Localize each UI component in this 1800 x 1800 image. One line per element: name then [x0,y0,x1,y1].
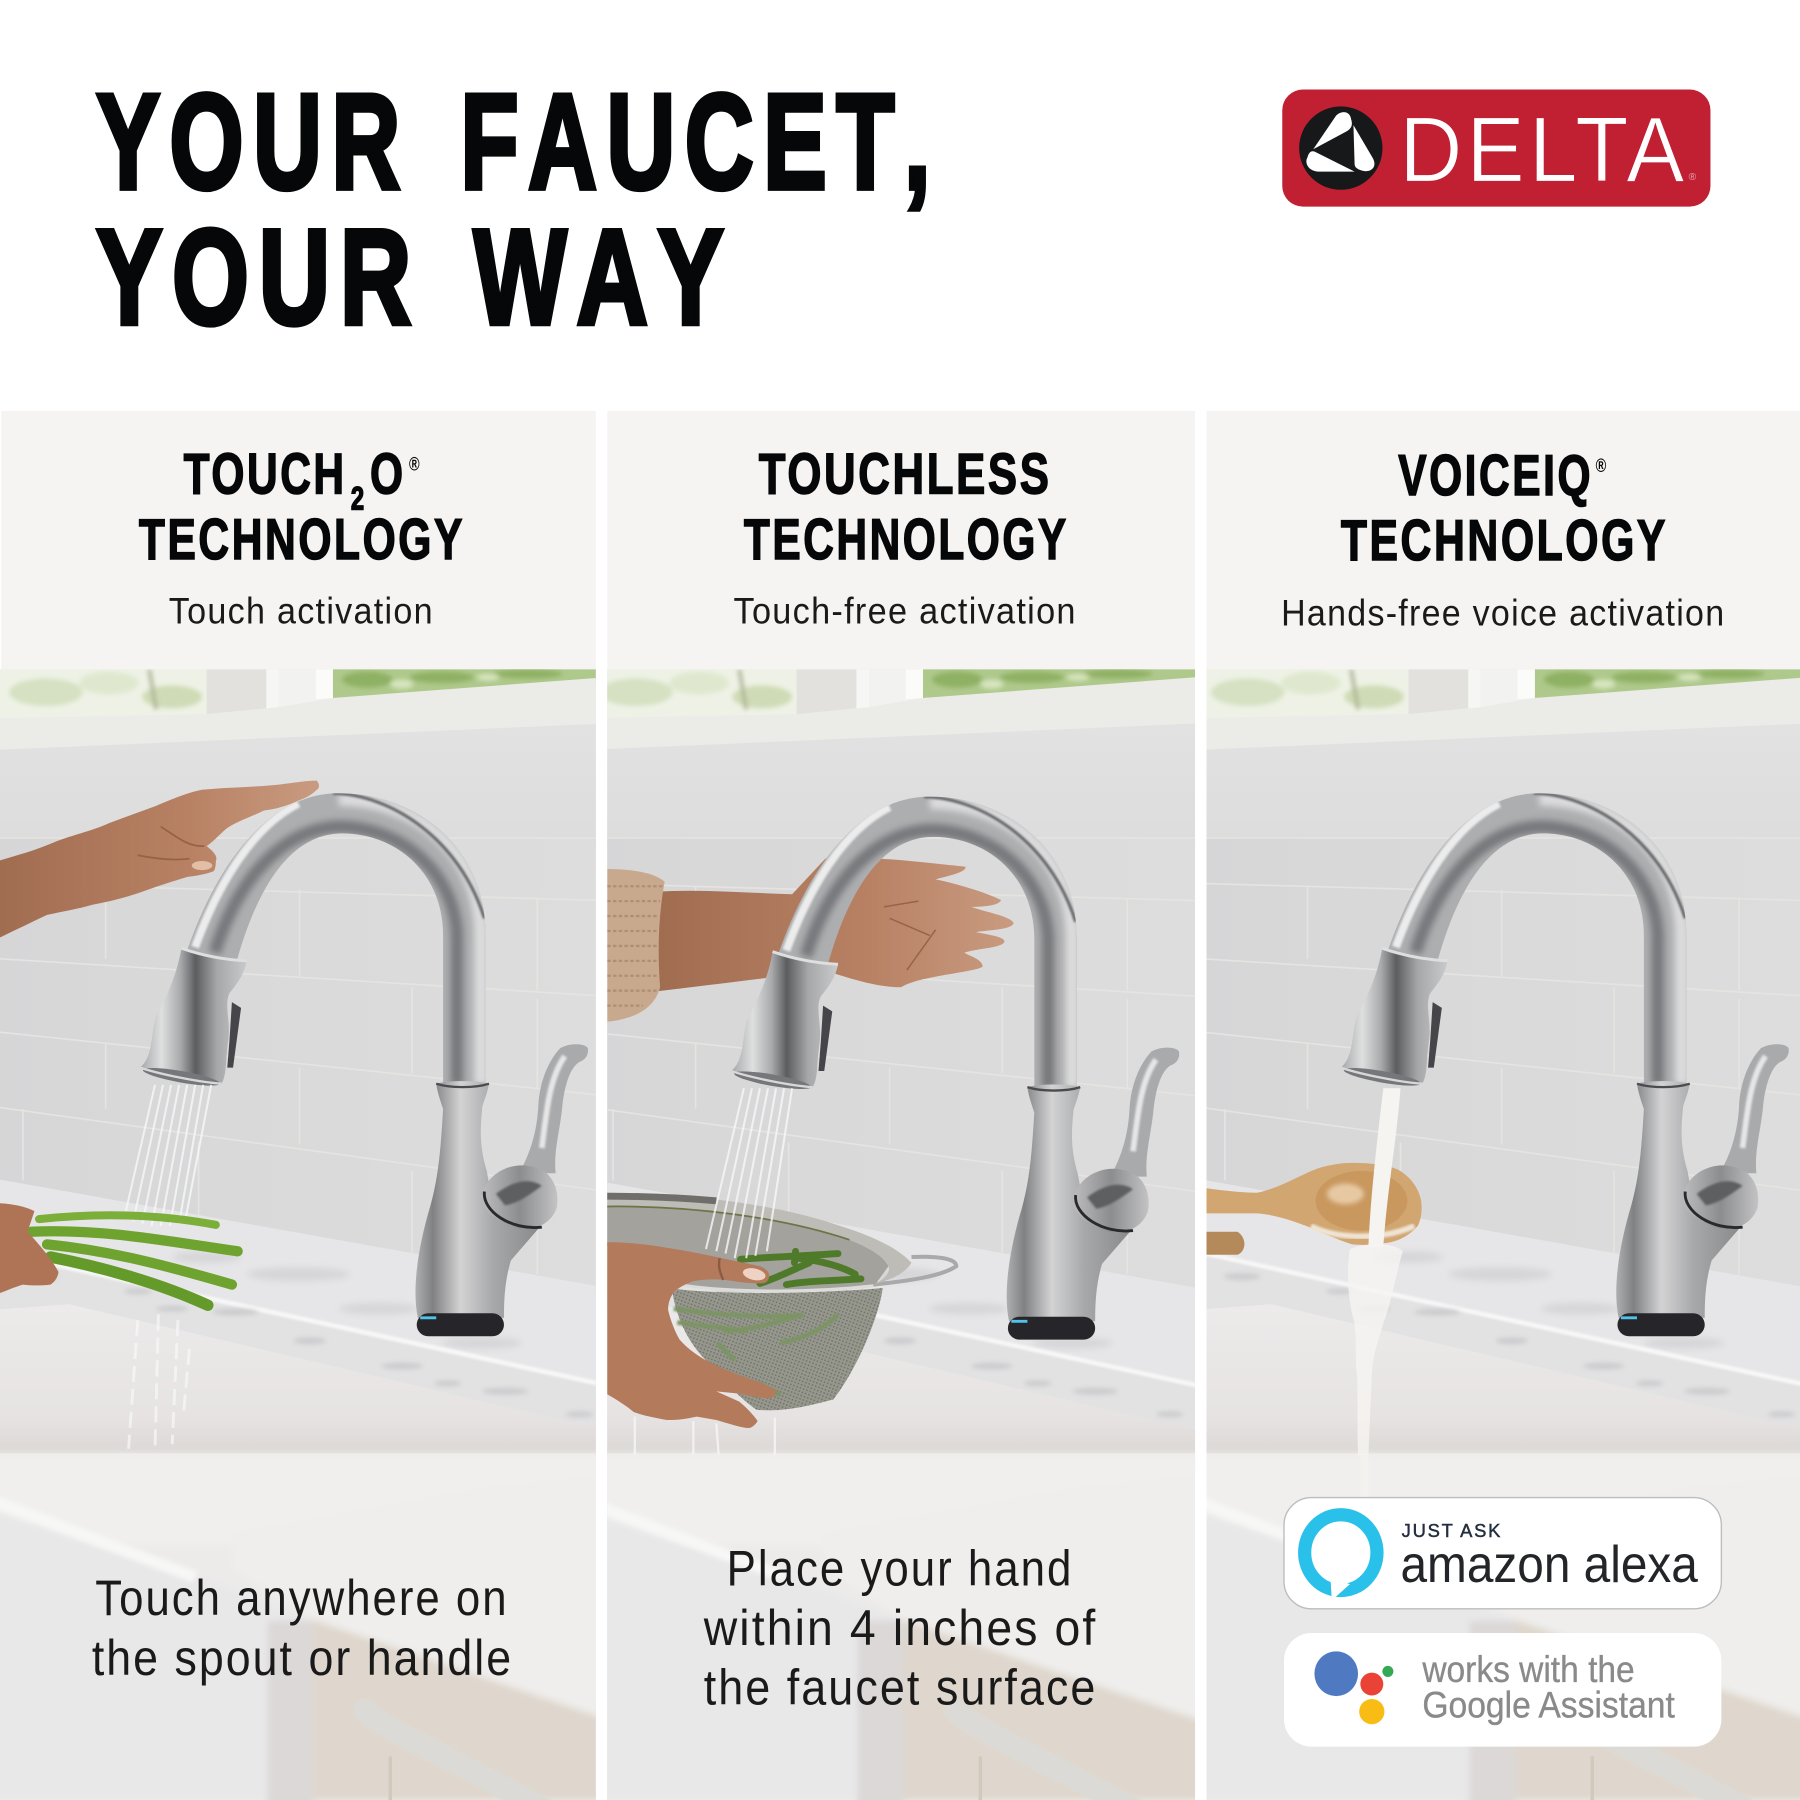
badge: Google Assistant [1284,1633,1721,1747]
heading: VoiceIQ technology [1341,442,1668,573]
heading: VoiceIQ technology: VOICEIQ [1398,442,1593,507]
arm and open hand [652,858,1014,992]
heading: Touch2O technology: ® [409,452,422,475]
heading: Touch2O technology: 2 [351,480,367,517]
callout: touchless instruction: Place your hand [727,1539,1073,1596]
panel: Touch2O header [1,411,596,669]
text: works with the Google Assistant [1421,1649,1675,1725]
wooden spoon [1205,1163,1422,1245]
title: YOUR FAUCET, [96,65,940,217]
subheading: Touch activation [169,590,434,631]
faucet [140,793,588,1336]
logo: Delta: ® [1689,172,1697,183]
title: YOUR WAY [96,201,734,353]
badge: Amazon Alexa [1284,1498,1721,1609]
callout: touchless instruction: the faucet surface [704,1659,1097,1716]
water drips [635,1417,775,1454]
panel: Touchless header [607,411,1195,669]
callout: touchless instruction: within 4 inches of [703,1599,1097,1656]
sweater cuff [607,869,665,1022]
faucet [731,797,1179,1340]
water spray [706,1088,792,1258]
text: amazon alexa: amazon alexa [1401,1535,1698,1593]
heading: Touch2O technology [139,441,465,572]
subheading: Touch-free activation [734,590,1077,631]
heading: VoiceIQ technology: ® [1596,454,1609,476]
wordmark: DELTA [1399,97,1689,201]
hand holding strainer [606,1242,776,1428]
text: works with the Google Assistant: works with the [1421,1649,1635,1690]
heading: Touchless technology: TOUCHLESS [759,443,1052,507]
callout: touch instruction [92,1569,513,1686]
strainer bowl [606,1193,956,1410]
heading: Touch2O technology: O [370,441,406,506]
icon: Alexa ring [1305,1515,1377,1597]
callout: touchless instruction [703,1539,1097,1716]
panel: VoiceIQ photo [1179,669,1800,1800]
subheading: Hands-free voice activation [1281,593,1725,634]
cutting board [1205,1232,1244,1255]
icon: Delta triangle mark [1299,106,1382,190]
panel: Touch2O photo [0,669,596,1800]
water spray [124,1085,211,1226]
water stream [1348,1088,1402,1454]
hand touching the spout [0,781,319,940]
heading: Touch2O technology: TECHNOLOGY [139,508,465,572]
callout: touch instruction: Touch anywhere on [95,1569,509,1626]
heading: Touchless technology: TECHNOLOGY [744,508,1069,572]
title [96,65,940,353]
panel: Touchless photo [607,669,1195,1800]
water falling in sink [129,1314,189,1452]
logo: Delta [1282,90,1710,207]
faucet [1341,793,1789,1336]
panel: VoiceIQ header [1207,411,1800,669]
heading: VoiceIQ technology: TECHNOLOGY [1341,509,1668,573]
heading: Touch2O technology: TOUCH [184,441,347,506]
hand holding onions [0,1203,59,1295]
icon: Google Assistant dots [1314,1651,1393,1724]
green beans [740,1251,861,1285]
heading: Touchless technology [744,443,1069,572]
green onions [31,1215,238,1305]
text: works with the Google Assistant: Google Assistant [1422,1684,1675,1725]
text: just ask: JUST ASK [1402,1520,1501,1541]
callout: touch instruction: the spout or handle [92,1629,513,1686]
